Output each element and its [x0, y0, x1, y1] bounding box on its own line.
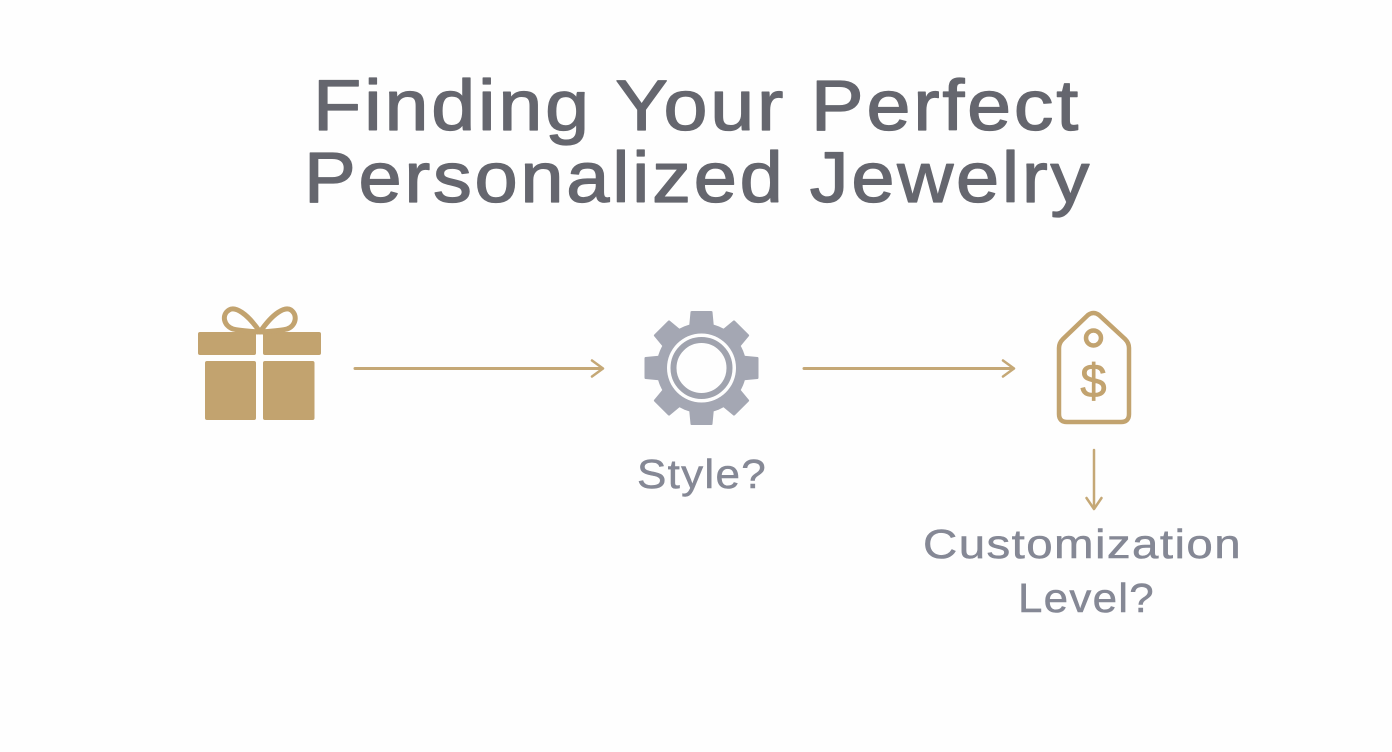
title — [304, 67, 1092, 218]
label: customization level — [923, 521, 1242, 621]
arrow: gift to style — [355, 360, 603, 376]
arrow: style to price tag — [804, 360, 1014, 376]
arrow: price tag to customization — [1086, 450, 1102, 509]
title: Personalized Jewelry — [304, 139, 1092, 218]
icon: gear — [644, 311, 758, 425]
icon: gift box — [198, 309, 321, 420]
label: customization level: Customization — [923, 521, 1242, 567]
title: Finding Your Perfect — [313, 67, 1081, 146]
icon: price tag: $ — [1080, 354, 1107, 407]
label: customization level: Level? — [1018, 575, 1155, 621]
icon: price tag — [1059, 313, 1129, 422]
label: style: Style? — [637, 451, 767, 497]
